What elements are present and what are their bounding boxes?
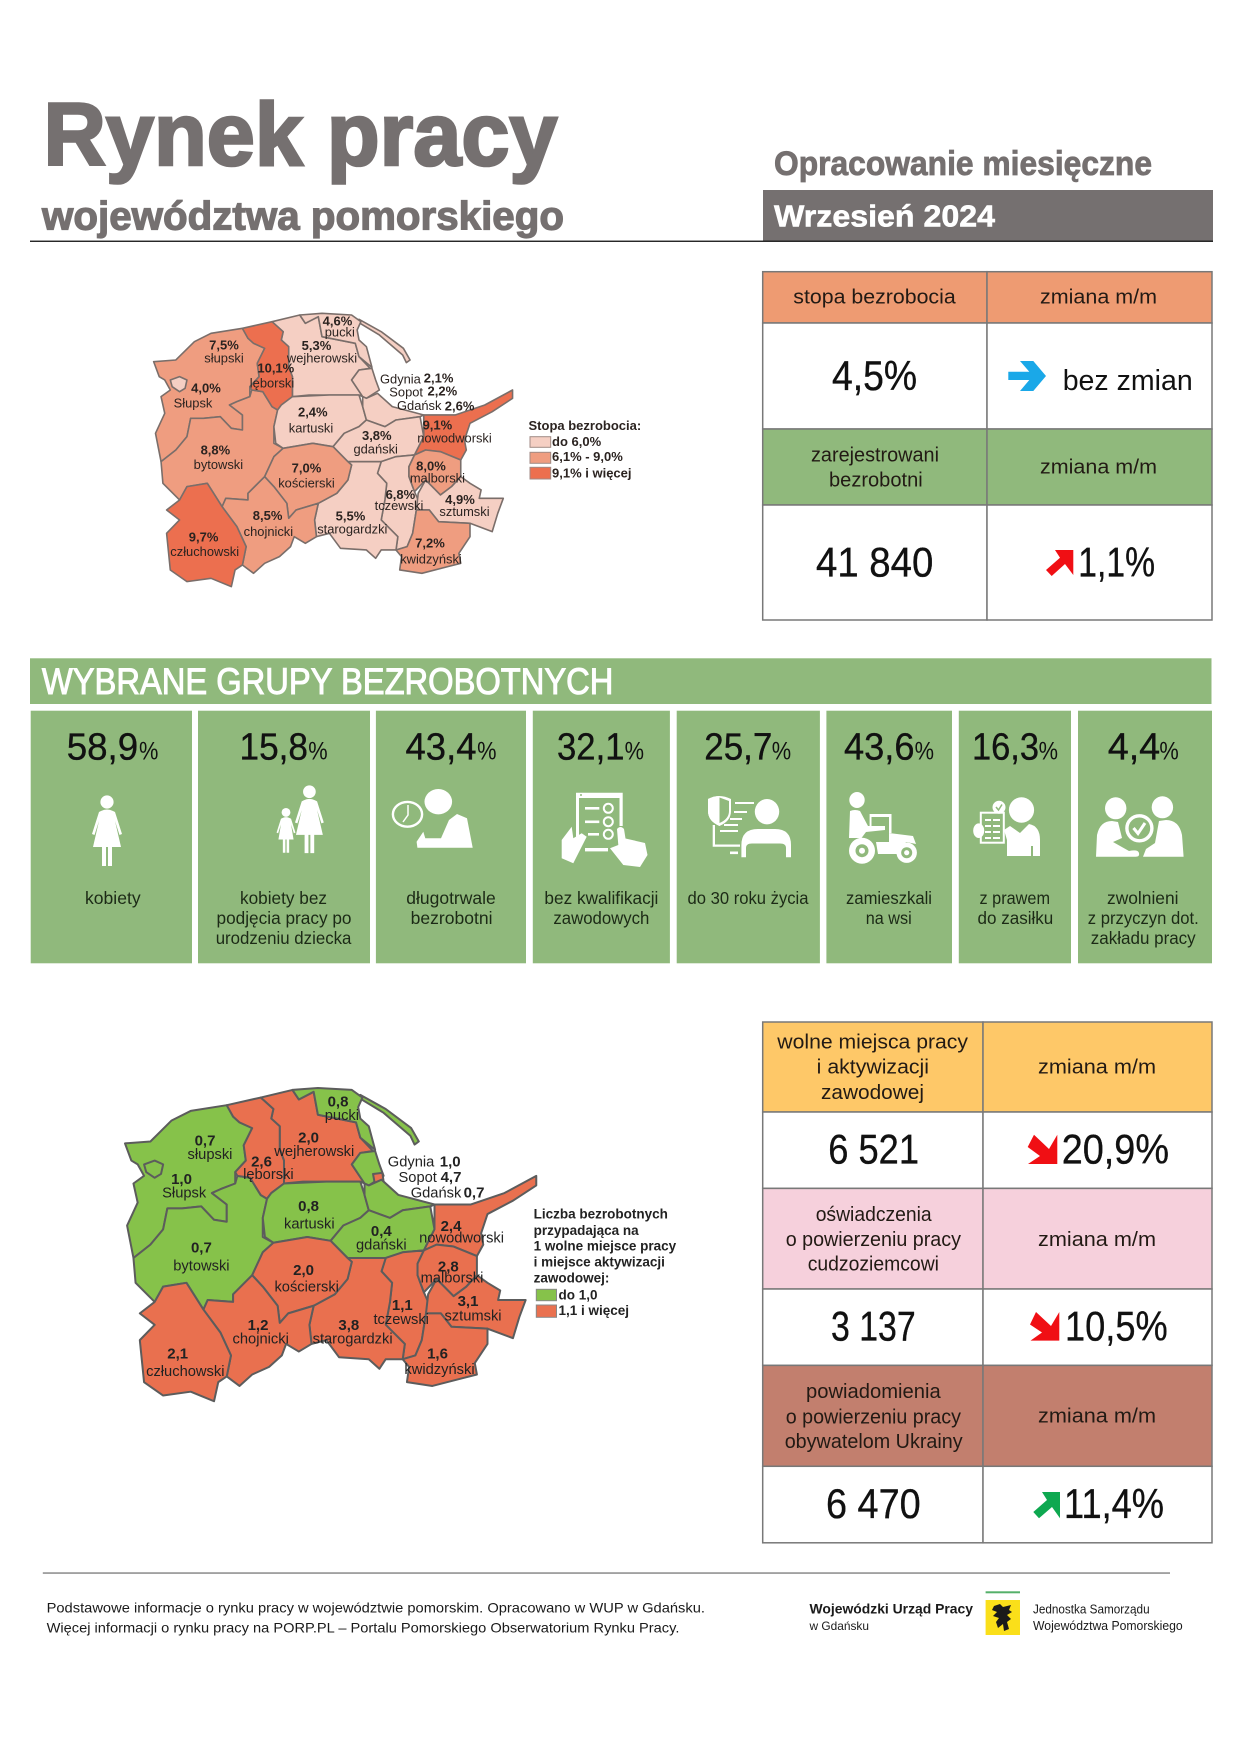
- map labels: człuchowski: [146, 1364, 224, 1380]
- footer note: Podstawowe informacje o rynku pracy w województwie pomorskim. Opracowano w WUP w Gdańsku.: [47, 1600, 705, 1616]
- map labels: 2,8: [438, 1259, 459, 1276]
- map labels: 2,4: [441, 1218, 462, 1235]
- map labels: 2,0: [293, 1262, 314, 1279]
- header: notifications for Ukrainians: powiadomienia: [806, 1381, 942, 1403]
- logo block: Jednostka Samorządu: [1033, 1602, 1150, 1616]
- panel: company-related dismissal: %: [1159, 737, 1179, 765]
- map labels: człuchowski: [170, 544, 239, 559]
- icon: person with clipboard: [973, 797, 1040, 856]
- map labels: 2,0: [298, 1130, 319, 1147]
- panel: women after childbirth: %: [308, 737, 328, 765]
- header: notifications for Ukrainians: zmiana m/m: [1038, 1406, 1156, 1428]
- row: declarations value: 3 137: [831, 1303, 916, 1350]
- panel: long-term unemployed: długotrwale: [406, 888, 496, 908]
- map labels: bytowski: [194, 457, 243, 472]
- footer note: [47, 1600, 705, 1635]
- map labels: Słupsk: [174, 396, 213, 411]
- row: notifications value: [763, 1466, 1212, 1543]
- panel: long-term unemployed: [376, 711, 526, 963]
- row: vacancies value: [763, 1112, 1212, 1188]
- map labels: 3,8: [338, 1317, 359, 1334]
- header: declarations for foreigners: [763, 1188, 1212, 1289]
- map labels: 10,1%: [257, 361, 295, 376]
- map: unemployment rate: [154, 313, 641, 587]
- map labels: 3,1: [458, 1293, 478, 1310]
- panel: no qualifications: [533, 711, 670, 963]
- map labels: 2,6%: [445, 398, 475, 413]
- map labels: słupski: [188, 1147, 232, 1163]
- panel: no qualifications: bez kwalifikacji: [544, 888, 658, 908]
- map labels: sztumski: [439, 504, 490, 519]
- map labels: 0,8: [298, 1198, 319, 1215]
- header: registered unemployed: zarejestrowani: [811, 445, 939, 467]
- map labels: 5,5%: [336, 509, 366, 524]
- map legend: 6,1% - 9,0%: [552, 449, 623, 464]
- row: rate value: bez zmian: [1063, 365, 1193, 397]
- map labels: Sopot: [389, 385, 423, 400]
- map labels: kościerski: [274, 1280, 339, 1296]
- panel: women: [31, 711, 192, 963]
- icon: mother and child: [277, 785, 324, 853]
- map labels: nowodworski: [419, 1230, 504, 1246]
- date box: Wrzesień 2024: [774, 199, 996, 234]
- panel: company-related dismissal: zakładu pracy: [1091, 928, 1196, 948]
- map labels: 1,1: [392, 1297, 413, 1314]
- panel: benefit eligible: 16,3: [972, 726, 1039, 768]
- map labels: wejherowski: [286, 351, 357, 366]
- map labels: 0,7: [191, 1240, 212, 1257]
- panel: company-related dismissal: [1078, 711, 1212, 963]
- header: unemployment rate: stopa bezrobocia: [793, 286, 957, 308]
- map labels: 8,8%: [201, 442, 231, 457]
- row: registered value: 41 840: [816, 539, 933, 586]
- panel: long-term unemployed: bezrobotni: [411, 908, 493, 928]
- panel: women after childbirth: kobiety bez: [240, 888, 327, 908]
- map legend: Stopa bezrobocia:: [528, 418, 641, 433]
- icon: Pomeranian griffin crest: [986, 1600, 1020, 1635]
- panel: benefit eligible: do zasiłku: [978, 908, 1053, 928]
- map labels: starogardzki: [313, 1331, 393, 1347]
- header: notifications for Ukrainians: [763, 1365, 1212, 1466]
- row: registered value: [763, 505, 1212, 620]
- row: declarations value: [763, 1289, 1212, 1365]
- header: unemployment rate: [763, 272, 1212, 323]
- header: declarations for foreigners: cudzoziemcowi: [808, 1254, 939, 1276]
- header: vacancies: wolne miejsca pracy: [776, 1032, 968, 1054]
- map labels: 0,4: [371, 1223, 392, 1240]
- panel: under 30: %: [772, 737, 791, 765]
- row: notifications value: 11,4%: [1064, 1480, 1164, 1527]
- map labels: 8,0%: [416, 459, 446, 474]
- header: vacancies: zmiana m/m: [1038, 1057, 1156, 1079]
- map labels: kartuski: [289, 421, 333, 436]
- panel: under 30: 25,7: [704, 726, 772, 768]
- header: notifications for Ukrainians: obywatelom Ukrainy: [785, 1431, 963, 1453]
- map labels: chojnicki: [233, 1331, 289, 1347]
- panel: benefit eligible: z prawem: [980, 888, 1050, 908]
- map labels: 7,5%: [209, 337, 239, 352]
- panel: benefit eligible: [959, 711, 1071, 963]
- row: rate value: [763, 323, 1212, 429]
- header: notifications for Ukrainians: o powierzeniu pracy: [786, 1406, 961, 1428]
- map labels: nowodworski: [417, 431, 492, 446]
- panel: women after childbirth: [198, 711, 370, 963]
- map labels: 0,7: [464, 1184, 484, 1201]
- panel: rural residents: 43,6: [844, 726, 914, 768]
- footer note: Więcej informacji o rynku pracy na PORP.PL – Portalu Pomorskiego Obserwatorium Rynku Pracy.: [47, 1619, 679, 1635]
- panel: long-term unemployed: 43,4: [406, 726, 476, 768]
- map labels: [146, 1094, 504, 1380]
- logo block: Województwa Pomorskiego: [1033, 1619, 1183, 1633]
- panel: rural residents: [826, 711, 952, 963]
- panel: women: kobiety: [85, 888, 141, 908]
- map labels: Słupsk: [162, 1185, 207, 1201]
- map labels: Gdynia: [388, 1155, 435, 1171]
- map legend: przypadająca na: [534, 1223, 639, 1238]
- map legend: do 6,0%: [552, 434, 602, 449]
- row: notifications value: 6 470: [826, 1480, 921, 1527]
- map labels: 1,0: [171, 1171, 192, 1188]
- map labels: 8,5%: [253, 508, 283, 523]
- map labels: kwidzyński: [404, 1362, 475, 1378]
- map labels: pucki: [325, 325, 355, 340]
- subtitle: województwa pomorskiego: [41, 194, 564, 238]
- map labels: sztumski: [444, 1309, 502, 1325]
- map labels: 2,1: [167, 1345, 188, 1362]
- panel: no qualifications: 32,1: [557, 726, 624, 768]
- panel: rural residents: zamieszkali: [846, 888, 932, 908]
- header: declarations for foreigners: o powierzeniu pracy: [786, 1229, 961, 1251]
- section banner: WYBRANE GRUPY BEZROBOTNYCH: [42, 661, 613, 702]
- map labels: kartuski: [284, 1216, 335, 1232]
- panel: benefit eligible: %: [1039, 737, 1058, 765]
- map legend: do 1,0: [558, 1287, 598, 1302]
- map labels: 4,9%: [445, 492, 475, 507]
- header: declarations for foreigners: zmiana m/m: [1038, 1229, 1156, 1251]
- panel: company-related dismissal: 4,4: [1108, 726, 1160, 768]
- map labels: lęborski: [243, 1167, 294, 1183]
- map labels: 7,0%: [292, 461, 322, 476]
- map legend: [528, 418, 641, 480]
- map labels: lęborski: [250, 376, 294, 391]
- map labels: 0,8: [328, 1094, 348, 1111]
- map labels: malborski: [410, 470, 465, 485]
- header: vacancies: [763, 1022, 1212, 1112]
- panel: rural residents: na wsi: [866, 908, 912, 928]
- section banner: [30, 658, 1212, 704]
- map labels: 4,0%: [191, 381, 221, 396]
- panel: women after childbirth: podjęcia pracy po: [216, 908, 352, 928]
- map labels: 4,7: [441, 1169, 461, 1186]
- map labels: Sopot: [398, 1170, 437, 1186]
- map labels: pucki: [325, 1108, 359, 1124]
- map labels: gdański: [356, 1237, 407, 1253]
- table: job offers and foreigners: [763, 1022, 1212, 1543]
- map labels: chojnicki: [244, 524, 293, 539]
- map labels: Gdańsk: [411, 1185, 462, 1201]
- date box: [763, 190, 1213, 241]
- panel: women: %: [139, 737, 158, 765]
- logo block: [809, 1591, 1183, 1635]
- header: registered unemployed: zmiana m/m: [1040, 456, 1157, 478]
- map labels: 4,6%: [323, 314, 353, 329]
- header: registered unemployed: bezrobotni: [829, 470, 923, 492]
- title: Rynek pracy: [44, 84, 558, 184]
- header: declarations for foreigners: oświadczenia: [816, 1204, 933, 1226]
- map labels: [170, 314, 492, 566]
- map labels: gdański: [353, 441, 398, 456]
- map labels: 3,8%: [362, 428, 392, 443]
- row: vacancies value: 6 521: [828, 1125, 919, 1172]
- map labels: 9,7%: [189, 530, 219, 545]
- map legend: 1 wolne miejsce pracy: [534, 1239, 677, 1254]
- map labels: 0,7: [195, 1133, 215, 1150]
- map legend: [534, 1206, 677, 1318]
- icon: two people with check mark: [1096, 796, 1184, 857]
- map labels: 1,0: [440, 1154, 461, 1171]
- map labels: 2,4%: [298, 405, 328, 420]
- map labels: wejherowski: [273, 1144, 354, 1160]
- map labels: 5,3%: [302, 338, 332, 353]
- map labels: słupski: [204, 351, 244, 366]
- map labels: 2,2%: [428, 384, 458, 399]
- icon: person at monitor: [708, 796, 791, 857]
- map labels: kościerski: [278, 475, 335, 490]
- header: vacancies: i aktywizacji: [817, 1057, 929, 1079]
- map labels: 2,1%: [424, 371, 454, 386]
- header: registered unemployed: [763, 429, 1212, 505]
- row: vacancies value: 20,9%: [1062, 1125, 1169, 1172]
- logo block: Wojewódzki Urząd Pracy: [810, 1600, 973, 1616]
- map labels: malborski: [421, 1271, 483, 1287]
- map labels: kwidzyński: [400, 551, 462, 566]
- map labels: starogardzki: [317, 521, 387, 536]
- panel: rural residents: %: [915, 737, 934, 765]
- map labels: 7,2%: [415, 536, 445, 551]
- map labels: Gdynia: [380, 372, 422, 386]
- header: [30, 84, 1213, 242]
- row: declarations value: 10,5%: [1065, 1303, 1168, 1350]
- map legend: zawodowej:: [534, 1271, 609, 1286]
- map labels: tczewski: [373, 1312, 429, 1328]
- panel: no qualifications: %: [625, 737, 644, 765]
- icon: person with clock: [393, 789, 473, 848]
- panel: women after childbirth: urodzeniu dziecka: [216, 928, 352, 948]
- panel: no qualifications: zawodowych: [553, 908, 649, 928]
- header: vacancies: zawodowej: [821, 1082, 924, 1104]
- map labels: Gdańsk: [397, 398, 442, 413]
- icon: tablet and hands: [562, 793, 648, 867]
- map labels: 9,1%: [423, 417, 453, 432]
- map labels: bytowski: [173, 1259, 230, 1275]
- map legend: 9,1% i więcej: [552, 465, 632, 480]
- map labels: 2,6: [251, 1154, 272, 1171]
- header: unemployment rate: zmiana m/m: [1040, 286, 1157, 308]
- panel: company-related dismissal: z przyczyn dot.: [1088, 908, 1199, 928]
- map legend: i miejsce aktywizacji: [534, 1255, 665, 1270]
- icon: farmer on tractor: [849, 792, 917, 864]
- panel: long-term unemployed: %: [477, 737, 496, 765]
- row: rate value: 4,5%: [832, 352, 917, 399]
- panel: women: 58,9: [67, 726, 138, 768]
- panel: under 30: do 30 roku życia: [688, 888, 809, 908]
- publication type: Opracowanie miesięczne: [774, 145, 1152, 183]
- map labels: 1,6: [427, 1345, 448, 1362]
- panel: company-related dismissal: zwolnieni: [1107, 888, 1178, 908]
- map labels: 1,2: [248, 1317, 268, 1334]
- panel: under 30: [677, 711, 820, 963]
- table: unemployment: [763, 272, 1212, 620]
- panel: women after childbirth: 15,8: [240, 726, 308, 768]
- map legend: Liczba bezrobotnych: [534, 1206, 668, 1221]
- logo block: w Gdańsku: [809, 1619, 869, 1633]
- map labels: 6,8%: [386, 487, 416, 502]
- map labels: tczewski: [375, 498, 423, 513]
- icon: woman: [92, 795, 122, 866]
- map legend: 1,1 i więcej: [558, 1303, 629, 1318]
- map: unemployed per job offer: [125, 1088, 677, 1401]
- row: registered value: 1,1%: [1078, 539, 1155, 586]
